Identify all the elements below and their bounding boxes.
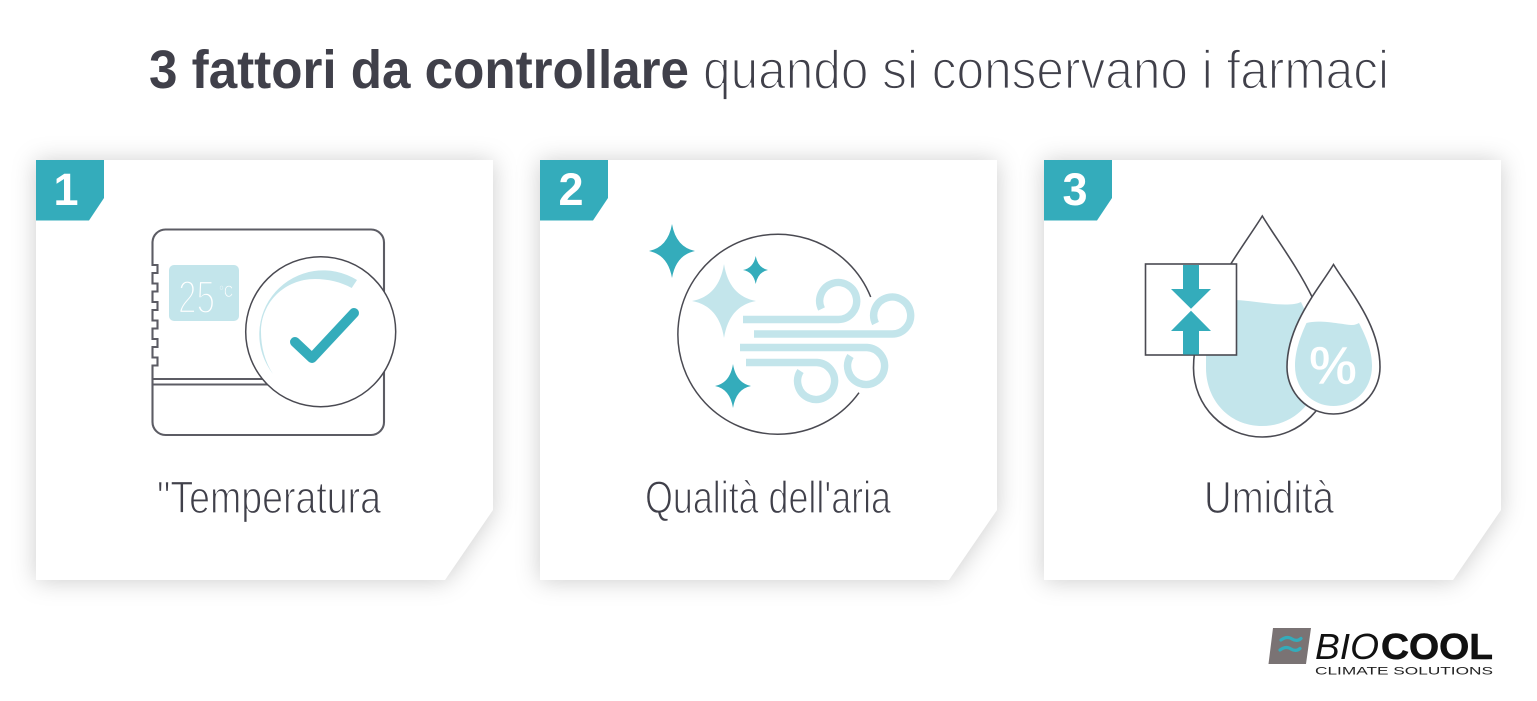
- badge 1: 1: [53, 164, 79, 215]
- panel: umidita: [1044, 160, 1501, 580]
- icon: thermostat: [152, 229, 396, 435]
- badge 2: 2: [558, 164, 584, 215]
- badge 3: 3: [1062, 164, 1088, 215]
- title: quando si conservano i farmaci: [703, 38, 1389, 100]
- badge 2: [540, 160, 608, 220]
- title: 3 fattori da controllare: [149, 40, 689, 100]
- badge 1: [36, 160, 104, 220]
- panel: qualita dell'aria: [540, 160, 997, 580]
- title: [149, 38, 1389, 100]
- icon: humidity drops: [1146, 216, 1380, 437]
- logo: biocool: CLIMATE SOLUTIONS: [1315, 666, 1493, 678]
- label: Qualità dell'aria: [645, 472, 892, 523]
- temperature display: 25: [178, 271, 215, 323]
- icon: humidity drops: %: [1309, 336, 1357, 396]
- label: "Temperatura: [157, 472, 382, 523]
- logo: biocool: BIO: [1315, 626, 1379, 667]
- temperature display: [169, 265, 239, 323]
- icon: air: [649, 224, 911, 434]
- logo: biocool: COOL: [1381, 626, 1493, 667]
- label: Umidità: [1204, 472, 1335, 523]
- logo: biocool: [1268, 626, 1493, 678]
- badge 3: [1044, 160, 1112, 220]
- panel: temperatura: [36, 160, 493, 580]
- magnifier circle with check: [246, 257, 396, 407]
- temperature display: °C: [219, 282, 233, 301]
- pressure box: [1146, 264, 1236, 355]
